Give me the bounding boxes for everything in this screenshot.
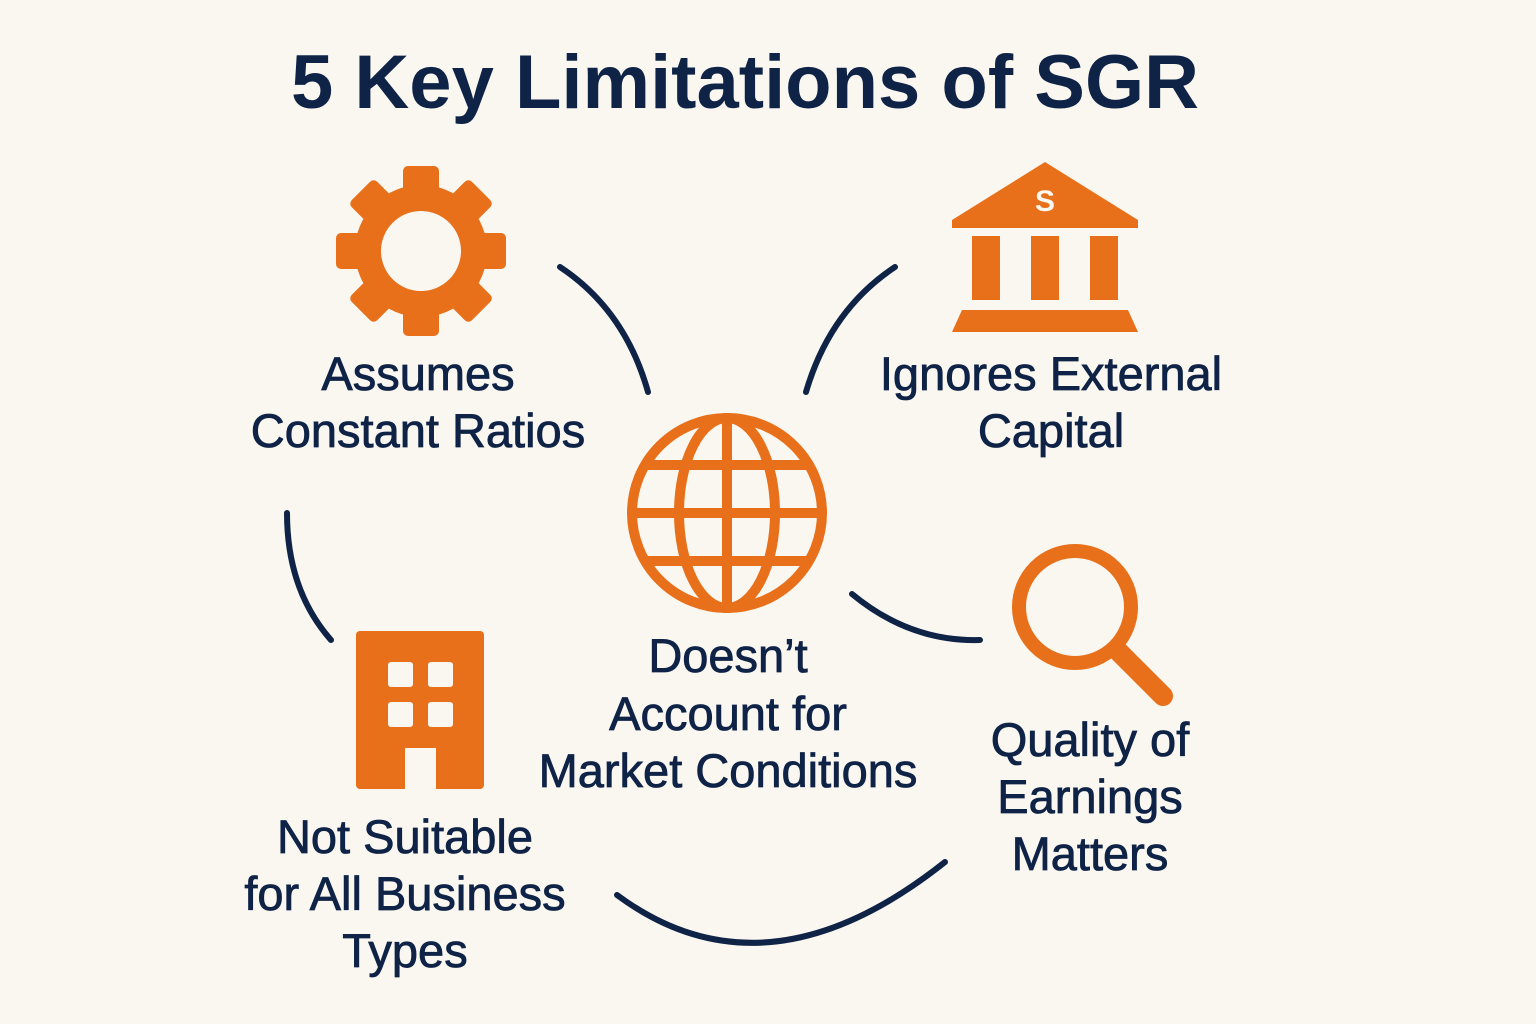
arrow: gear to globe xyxy=(560,267,648,392)
label: not suitable: for All Business xyxy=(244,867,566,920)
arrow: bank to globe xyxy=(806,267,895,392)
icon: bank xyxy=(952,162,1138,332)
label: ignores external capital: Ignores External xyxy=(880,347,1222,400)
label: market conditions: Account for xyxy=(609,687,847,740)
label: ignores external capital xyxy=(880,347,1222,457)
arrow: left side xyxy=(287,513,331,640)
label: quality of earnings xyxy=(991,713,1190,880)
label: market conditions xyxy=(539,629,917,797)
label: assumes constant ratios xyxy=(251,347,585,457)
title: 5 Key Limitations of SGR xyxy=(291,40,1199,125)
label: not suitable xyxy=(244,810,566,977)
label: market conditions: Market Conditions xyxy=(539,744,917,797)
label: quality of earnings: Matters xyxy=(1012,827,1168,880)
icon: gear xyxy=(336,166,506,336)
label: assumes constant ratios: Assumes xyxy=(321,347,515,400)
label: not suitable: Types xyxy=(342,924,468,977)
label: ignores external capital: Capital xyxy=(978,404,1124,457)
label: market conditions: Doesn’t xyxy=(648,629,808,682)
label: quality of earnings: Quality of xyxy=(991,713,1190,766)
icon: magnifier xyxy=(1019,551,1163,696)
icon: bank: S xyxy=(1035,185,1055,218)
icon: globe xyxy=(632,418,822,608)
arrow: globe to magnifier xyxy=(852,594,980,640)
arrow: bottom xyxy=(617,862,945,943)
label: not suitable: Not Suitable xyxy=(277,810,533,863)
icon: building xyxy=(356,631,484,790)
label: quality of earnings: Earnings xyxy=(997,770,1183,823)
label: assumes constant ratios: Constant Ratios xyxy=(251,404,585,457)
